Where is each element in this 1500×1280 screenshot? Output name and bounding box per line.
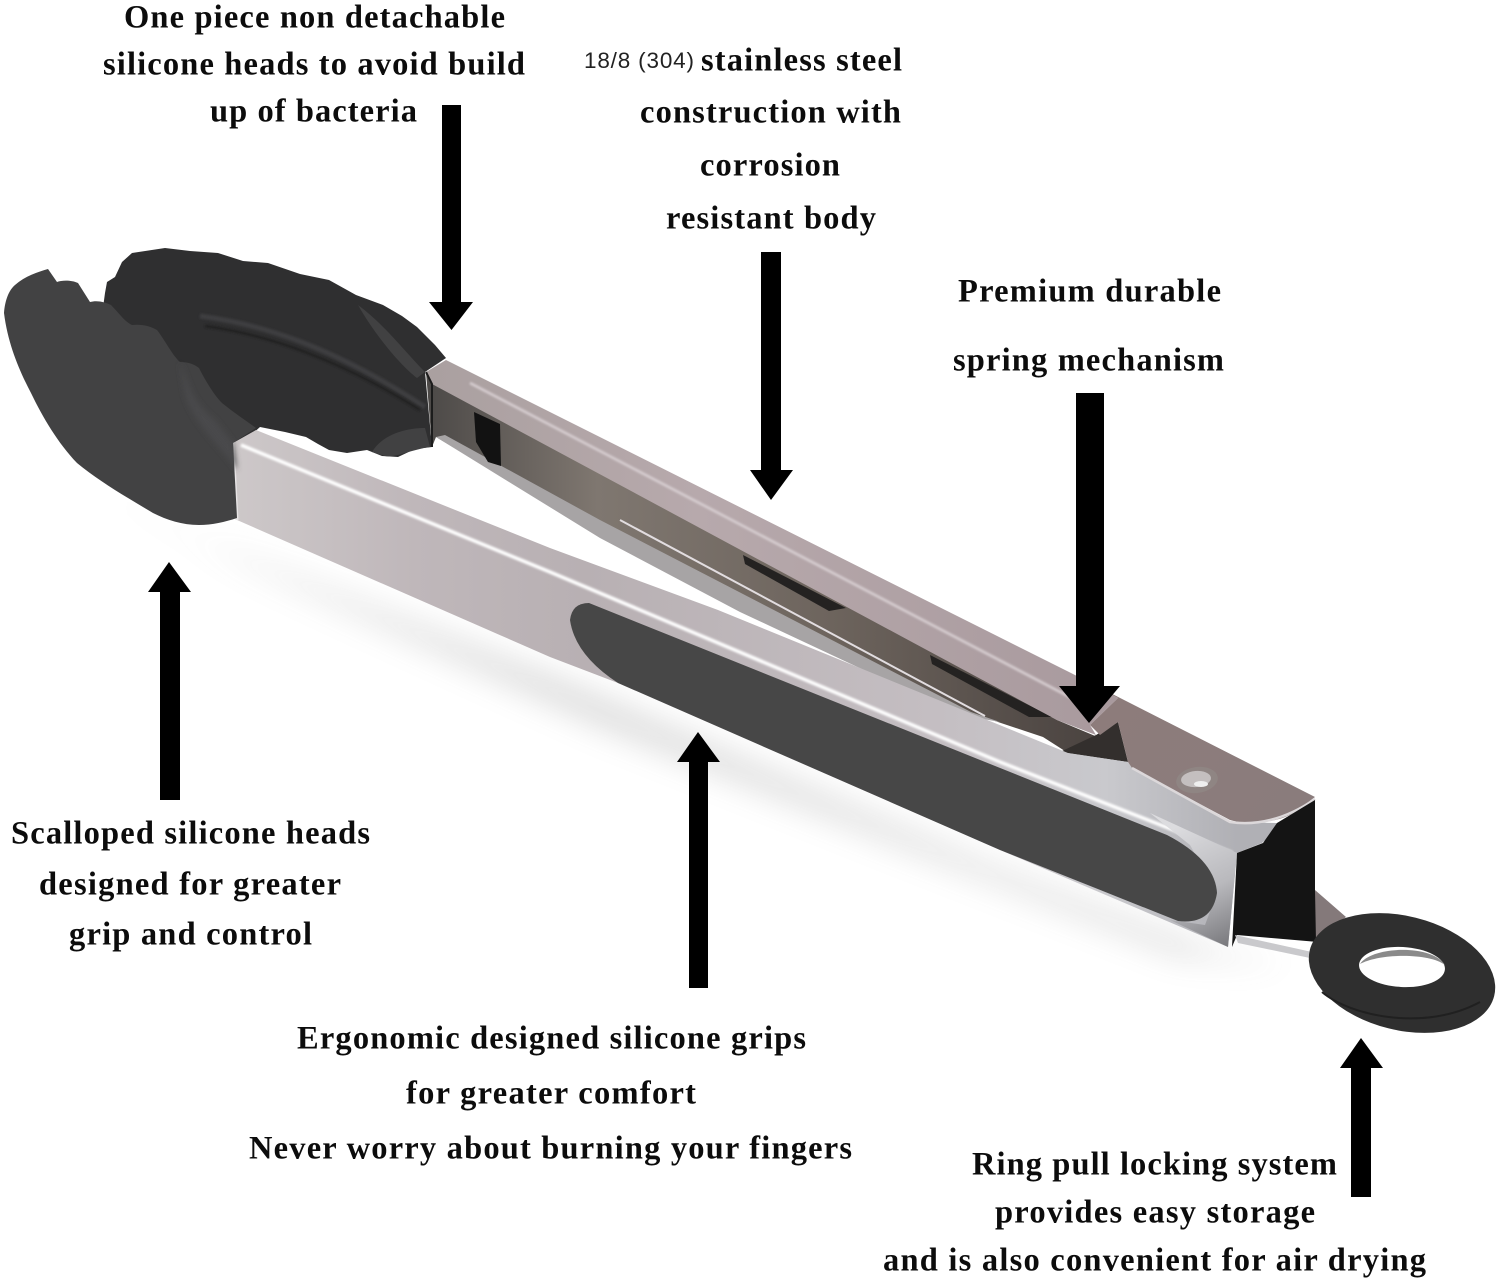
upper arm: side channel xyxy=(426,372,1110,753)
arrow: ergonomic grips xyxy=(677,732,720,988)
text: ergonomic grips xyxy=(249,1020,852,1166)
product photo: tongs xyxy=(4,248,1500,1051)
inner channel light strip xyxy=(436,435,1000,722)
soft shadow xyxy=(70,480,1290,965)
arrow: silicone heads down arrow xyxy=(429,105,473,330)
upper arm: top face xyxy=(426,360,1118,735)
text: spring mechanism: Premium durable xyxy=(958,274,1221,310)
text: ergonomic grips: Never worry about burning your fingers xyxy=(249,1130,852,1166)
text: stainless steel: construction with xyxy=(640,94,901,130)
text: one piece heads: silicone heads to avoid build xyxy=(103,46,525,82)
text: scalloped heads: grip and control xyxy=(69,916,312,952)
text: ring pull xyxy=(883,1146,1426,1278)
silver strip xyxy=(1235,935,1312,958)
end silver panel xyxy=(1150,813,1237,947)
silicone ring xyxy=(1296,895,1500,1051)
text: ring pull: provides easy storage xyxy=(995,1194,1315,1230)
arrow: ring pull xyxy=(1340,1038,1383,1197)
text: ring pull: and is also convenient for air drying xyxy=(883,1242,1426,1278)
back silicone head xyxy=(100,248,446,457)
text: scalloped heads: Scalloped silicone heads xyxy=(11,816,370,852)
text: stainless steel: corrosion xyxy=(700,148,840,184)
text: one piece heads: One piece non detachable xyxy=(124,0,505,36)
text: ring pull: Ring pull locking system xyxy=(972,1146,1337,1182)
text: one piece heads: up of bacteria xyxy=(210,94,417,130)
text: stainless steel: resistant body xyxy=(666,200,876,236)
ring tang xyxy=(1315,890,1346,942)
rivet xyxy=(1174,764,1220,796)
text: spring mechanism xyxy=(953,274,1224,378)
slots xyxy=(743,555,1052,717)
back head rib xyxy=(200,305,430,456)
lower arm highlight xyxy=(241,445,1232,853)
text: scalloped heads xyxy=(11,816,370,952)
text: stainless steel xyxy=(584,42,902,236)
text: stainless steel: 18/8 (304) xyxy=(584,48,694,73)
arrow: scalloped heads xyxy=(148,562,191,800)
text: ergonomic grips: Ergonomic designed silicone grips xyxy=(297,1020,806,1056)
text: ergonomic grips: for greater comfort xyxy=(406,1076,696,1112)
text: stainless steel: stainless steel xyxy=(701,42,902,78)
text: spring mechanism: spring mechanism xyxy=(953,342,1224,378)
text: scalloped heads: designed for greater xyxy=(39,866,341,902)
arrow: spring mechanism xyxy=(1059,393,1120,723)
channel hole xyxy=(474,412,501,466)
silicone grip xyxy=(570,603,1217,921)
end box interior xyxy=(1232,800,1345,947)
front silicone head xyxy=(4,269,256,525)
text: one piece heads xyxy=(103,0,525,130)
notch shadow xyxy=(1060,722,1128,762)
arrow: stainless steel xyxy=(750,252,793,500)
pivot plate xyxy=(1071,673,1315,823)
lower arm xyxy=(233,430,1277,947)
